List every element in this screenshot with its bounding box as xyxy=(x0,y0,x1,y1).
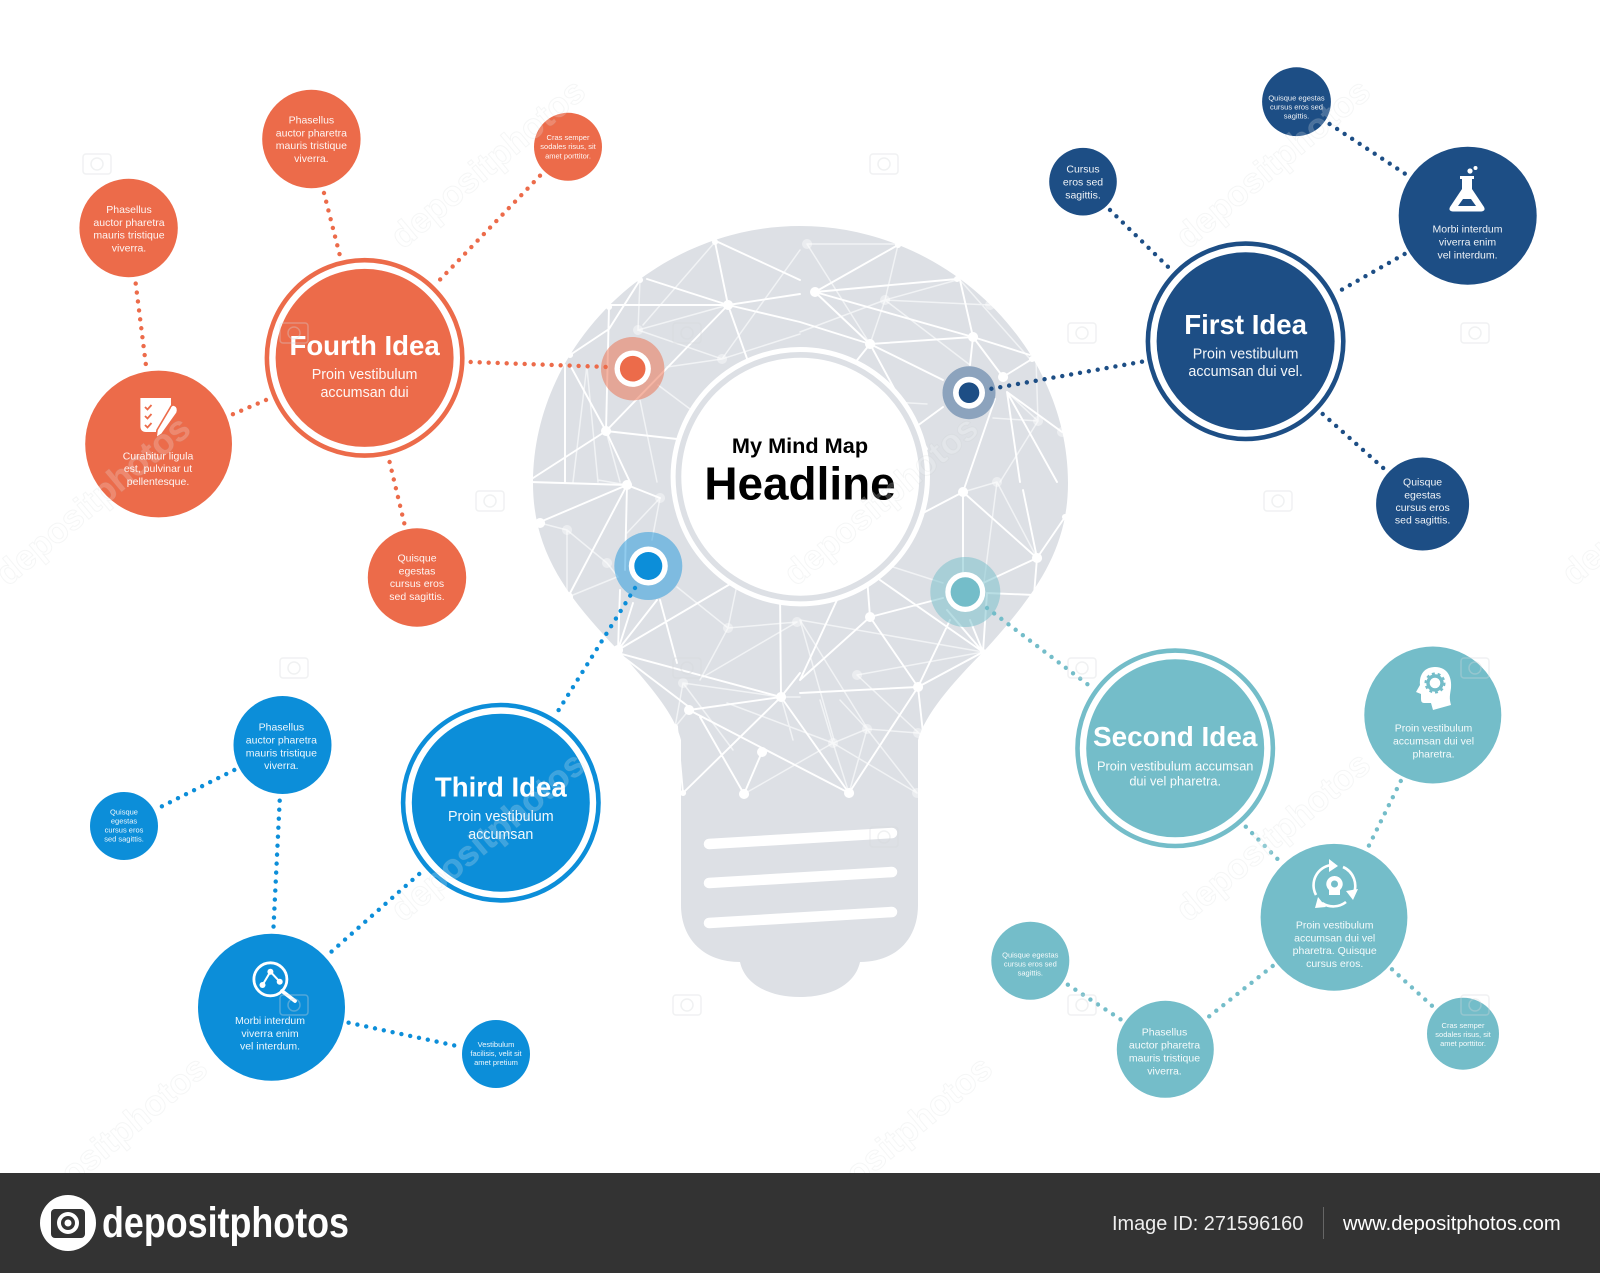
node: bottom: auctor pharetra xyxy=(1129,1040,1200,1052)
node: bottom: sed sagittis. xyxy=(389,591,445,603)
connectors xyxy=(136,176,608,525)
node: head icon: accumsan dui vel xyxy=(1393,735,1474,747)
icon: cycle arrows with bulb xyxy=(1314,859,1358,908)
node: cycle icon: accumsan dui vel xyxy=(1294,932,1375,944)
title: My Mind Map: My Mind Map xyxy=(732,433,868,458)
node: top: cursus eros sed xyxy=(1270,102,1323,112)
main node xyxy=(403,705,598,900)
bulb marker xyxy=(601,337,664,400)
main node: accumsan dui vel. xyxy=(1188,364,1303,380)
image id: Image ID: 271596160 xyxy=(1112,1213,1303,1235)
main node xyxy=(1078,651,1273,846)
node: top xyxy=(1262,67,1331,136)
main node: accumsan xyxy=(468,827,533,843)
main node: Proin vestibulum xyxy=(1193,346,1298,362)
watermark: depositphotos xyxy=(383,744,593,929)
main node: First Idea xyxy=(1184,309,1308,340)
node: right: Cras semper xyxy=(1442,1021,1485,1030)
node: top: auctor pharetra xyxy=(246,735,317,747)
node: icon xyxy=(1399,147,1537,285)
node: top: Phasellus xyxy=(259,722,304,734)
main node: Proin vestibulum xyxy=(312,367,417,383)
node: right: amet pretium xyxy=(474,1058,518,1067)
node: top: sagittis. xyxy=(1284,111,1309,120)
node: icon: vel interdum. xyxy=(1437,249,1498,261)
watermark: depositphotos xyxy=(790,1048,1000,1233)
node: bottom: Quisque xyxy=(397,552,437,564)
node: left: eros sed xyxy=(1063,177,1103,189)
node: right xyxy=(1427,998,1499,1070)
node: top right xyxy=(534,113,602,181)
main node: Third Idea xyxy=(435,772,567,803)
node: top: auctor pharetra xyxy=(276,127,347,139)
icon: depositphotos camera logo xyxy=(40,1195,96,1251)
node: left: viverra. xyxy=(112,242,146,254)
node: top: mauris tristique xyxy=(246,747,317,759)
headline: Headline xyxy=(704,457,896,509)
main node: dui vel pharetra. xyxy=(1129,774,1221,789)
connectors xyxy=(160,588,635,1046)
node: top right: sodales risus, sit xyxy=(540,142,597,151)
node: head icon: Proin vestibulum xyxy=(1395,723,1473,735)
connectors xyxy=(990,124,1407,469)
main node xyxy=(267,260,462,456)
node: left: sagittis. xyxy=(1018,968,1043,977)
bulb marker xyxy=(614,532,682,600)
node: left: mauris tristique xyxy=(93,230,165,242)
node: icon xyxy=(85,371,232,517)
node: top: Quisque egestas xyxy=(1268,94,1325,103)
network mesh xyxy=(530,242,1065,794)
node: icon: viverra enim xyxy=(1439,237,1496,249)
node: bottom xyxy=(368,528,466,627)
bulb marker xyxy=(942,366,996,419)
branch: Second Idea (teal) xyxy=(930,557,1501,1098)
centre title circle xyxy=(673,350,928,604)
node: icon xyxy=(198,934,345,1081)
node: bottom: egestas xyxy=(1404,489,1441,501)
node: far left: sed sagittis. xyxy=(104,834,144,843)
node: right: facilisis, velit sit xyxy=(470,1049,523,1058)
footer bar xyxy=(0,1173,1600,1273)
node: bottom: viverra. xyxy=(1147,1065,1182,1077)
website: www.depositphotos.com xyxy=(1342,1213,1561,1235)
logo wordmark: depositphotos xyxy=(102,1199,349,1247)
bulb silhouette xyxy=(533,226,1068,997)
branch: Third Idea (blue) xyxy=(90,532,682,1088)
icon: flask xyxy=(1449,166,1485,212)
main node: Proin vestibulum xyxy=(448,809,554,825)
node: bottom xyxy=(1376,458,1469,550)
watermark: depositphotos xyxy=(383,71,593,256)
node: cycle icon xyxy=(1261,844,1407,991)
branch: First Idea (navy) xyxy=(942,67,1537,551)
bulb marker xyxy=(930,557,1000,627)
node: top right: Cras semper xyxy=(547,133,590,142)
bulb base stripes xyxy=(709,833,892,923)
node: head icon: pharetra. xyxy=(1412,748,1455,760)
node: bottom: egestas xyxy=(399,565,435,577)
node: left: cursus eros sed xyxy=(1004,959,1057,968)
node: right: sodales risus, sit xyxy=(1435,1030,1492,1039)
node: right xyxy=(462,1020,530,1088)
connectors xyxy=(987,608,1433,1019)
main node: Second Idea xyxy=(1093,721,1258,752)
node: right: amet porttitor. xyxy=(1440,1039,1486,1048)
node: icon: viverra enim xyxy=(241,1028,299,1040)
watermark: depositphotos xyxy=(5,1048,215,1233)
node: bottom: cursus eros xyxy=(1395,502,1450,514)
node: left: auctor pharetra xyxy=(93,217,165,229)
node: cycle icon: Proin vestibulum xyxy=(1296,919,1374,931)
node: top: mauris tristique xyxy=(276,140,347,152)
node: far left: egestas xyxy=(111,816,137,825)
node: icon: Curabitur ligula xyxy=(123,450,193,462)
node: bottom: Phasellus xyxy=(1142,1027,1187,1039)
node: cycle icon: pharetra. Quisque xyxy=(1293,945,1377,957)
icon: checklist and pen xyxy=(140,398,178,438)
main node: Proin vestibulum accumsan xyxy=(1097,759,1253,774)
node: icon: vel interdum. xyxy=(240,1041,300,1053)
node: head icon xyxy=(1364,646,1501,784)
node: icon: est, pulvinar ut xyxy=(124,463,192,475)
main node: Fourth Idea xyxy=(289,330,440,361)
node: left xyxy=(1049,148,1117,216)
node: far left: cursus eros xyxy=(105,825,144,834)
node: bottom: sed sagittis. xyxy=(1395,515,1450,527)
branch: Fourth Idea (orange) xyxy=(79,90,664,627)
node: top: viverra. xyxy=(294,153,329,165)
icon: head with gear xyxy=(1416,667,1451,710)
watermark: depositphotos xyxy=(1168,71,1378,256)
node: left: sagittis. xyxy=(1065,189,1101,201)
icon: magnifier with nodes xyxy=(254,963,295,1001)
watermark: depositphotos xyxy=(1168,744,1378,929)
node: left xyxy=(79,179,178,277)
node: top: Phasellus xyxy=(289,115,334,127)
main node xyxy=(1148,244,1343,439)
node: bottom: cursus eros xyxy=(390,578,444,590)
node: left: Phasellus xyxy=(106,204,152,216)
node: icon: Morbi interdum xyxy=(1432,224,1503,236)
node: right: Vestibulum xyxy=(478,1040,514,1049)
node: top xyxy=(262,90,361,188)
node: bottom: Quisque xyxy=(1403,476,1442,488)
node: bottom: mauris tristique xyxy=(1129,1053,1200,1065)
node: left: Cursus xyxy=(1066,164,1100,176)
node: cycle icon: cursus eros. xyxy=(1306,958,1363,970)
node: top: viverra. xyxy=(264,760,299,772)
node: icon: pellentesque. xyxy=(127,476,189,488)
node: icon: Morbi interdum xyxy=(235,1015,305,1027)
node: far left: Quisque xyxy=(110,807,138,816)
node: left: Quisque egestas xyxy=(1002,950,1059,959)
node: left xyxy=(991,922,1069,1000)
main node: accumsan dui xyxy=(320,385,409,401)
light bulb with network mesh xyxy=(530,226,1068,997)
node: top right: amet porttitor. xyxy=(545,151,591,160)
node: far left xyxy=(90,792,158,860)
watermark: depositphotos xyxy=(776,408,986,593)
node: top xyxy=(234,696,332,794)
node: bottom xyxy=(1117,1001,1214,1098)
